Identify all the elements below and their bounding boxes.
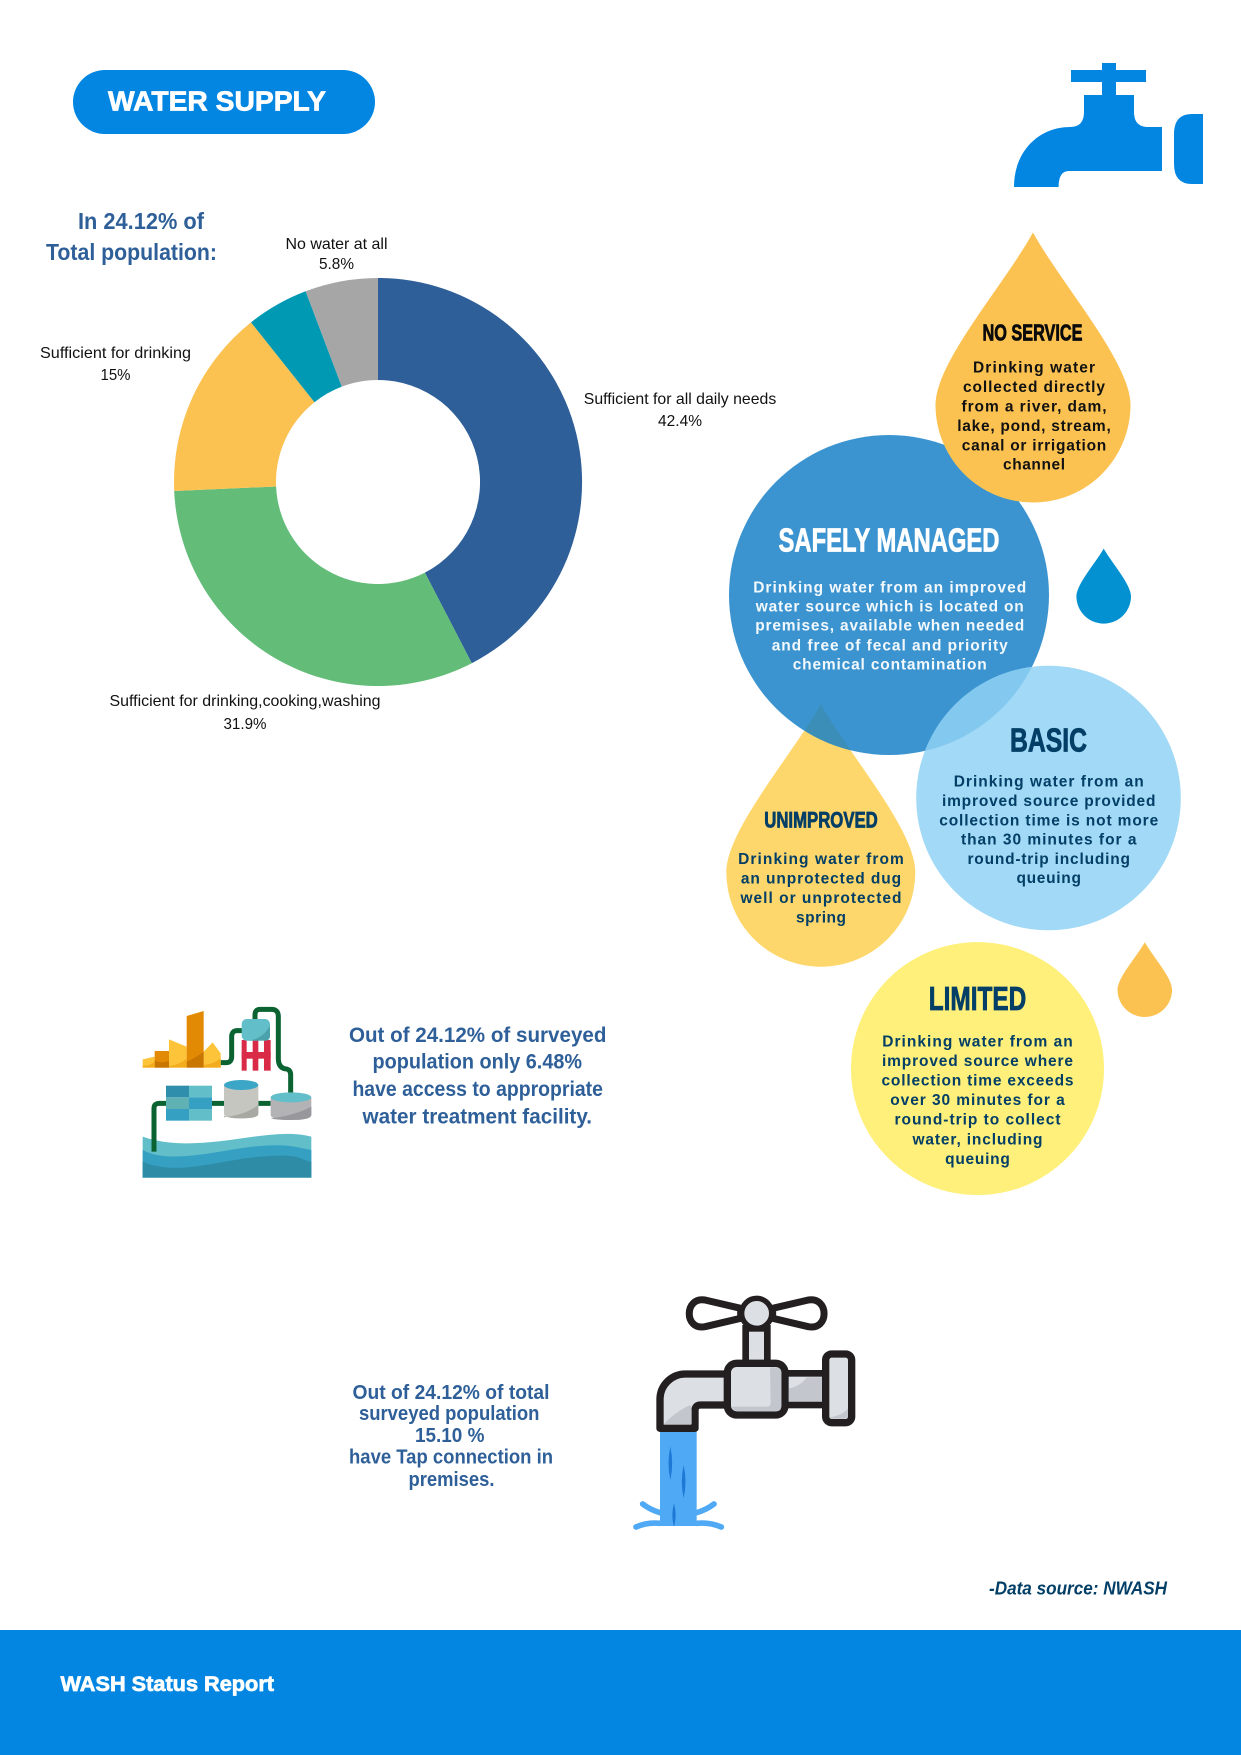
text: limited definition: collection time exceeds (882, 1072, 1074, 1090)
text: treatment facility statistic: have access to appropriate (352, 1078, 603, 1101)
text: treatment facility statistic (349, 1024, 606, 1128)
text: basic definition: collection time is not more (939, 812, 1159, 830)
text: safely managed definition: and free of fecal and priority (772, 638, 1008, 654)
text: basic definition: Drinking water from an (954, 774, 1144, 790)
panel: limited (851, 942, 1104, 1195)
chart label: sufficient for drinking (40, 345, 191, 384)
text: limited definition: water, including (912, 1132, 1042, 1148)
donut chart (174, 278, 582, 686)
heading: no service: NO SERVICE (982, 320, 1082, 346)
text: basic definition: round-trip including (967, 851, 1130, 868)
panel: basic (916, 666, 1181, 930)
text: limited definition: queuing (945, 1151, 1010, 1168)
heading: limited: LIMITED (929, 980, 1026, 1017)
footer text: WASH Status Report (60, 1673, 274, 1696)
text: safely managed definition: water source which is located on (755, 598, 1024, 616)
text: limited definition: Drinking water from an (882, 1034, 1073, 1050)
text: no service definition: from a river, dam, (962, 398, 1106, 416)
text: safely managed definition: Drinking water from an improved (753, 580, 1026, 596)
text: no service definition: Drinking water (973, 360, 1095, 376)
heading: safely managed: SAFELY MANAGED (778, 522, 1000, 558)
chart label: sufficient for drinking, cooking, washing (110, 693, 380, 733)
text: unimproved definition: well or unprotected (740, 890, 902, 907)
text: safely managed definition: premises, available when needed (755, 618, 1024, 634)
text: limited definition: over 30 minutes for a (890, 1092, 1065, 1109)
chart label: sufficient for all daily needs (584, 391, 776, 430)
text: safely managed definition: chemical contamination (793, 656, 987, 674)
chart label: sufficient for drinking: Sufficient for drinking (40, 345, 191, 362)
text: no service definition: channel (1003, 456, 1065, 474)
chart label: sufficient for all daily needs: Sufficient for all daily needs (584, 391, 776, 408)
chart heading: Total population: (46, 239, 217, 265)
text: no service definition: lake, pond, stream, (957, 418, 1111, 435)
chart label: no water at all: 5.8% (319, 256, 354, 273)
chart label: no water at all: No water at all (286, 236, 388, 253)
icon: running faucet (636, 1298, 852, 1527)
heading: basic: BASIC (1010, 722, 1087, 759)
chart heading (46, 208, 217, 265)
icon: orange water drop (1118, 942, 1172, 1017)
text: tap connection statistic: have Tap connection in (349, 1446, 553, 1468)
icon: water treatment plant (143, 1009, 311, 1178)
text: basic definition: queuing (1016, 870, 1081, 887)
chart label: no water at all (286, 236, 388, 273)
icon: blue water drop (1076, 549, 1131, 624)
text: unimproved definition: spring (796, 910, 846, 926)
text: no service definition (957, 360, 1111, 474)
text: limited definition (882, 1034, 1074, 1168)
drop shape: unimproved (726, 704, 915, 967)
text: basic definition: improved source provided (942, 793, 1155, 810)
text: no service definition: canal or irrigation (962, 438, 1106, 454)
text: safely managed definition (753, 580, 1026, 674)
chart heading: In 24.12% of (78, 208, 204, 234)
text: basic definition: than 30 minutes for a (961, 832, 1137, 848)
chart label: sufficient for all daily needs: 42.4% (658, 413, 702, 430)
chart label: sufficient for drinking: 15% (100, 367, 130, 384)
chart label: sufficient for drinking, cooking, washing: Sufficient for drinking,cooking,washing (110, 693, 380, 710)
text: tap connection statistic (349, 1382, 553, 1491)
text: treatment facility statistic: Out of 24.12% of surveyed (349, 1024, 606, 1047)
text: treatment facility statistic: population only 6.48% (373, 1050, 582, 1074)
text: tap connection statistic: premises. (408, 1469, 494, 1491)
text: basic definition (939, 774, 1159, 887)
heading: unimproved: UNIMPROVED (764, 807, 878, 832)
text: limited definition: round-trip to collect (894, 1112, 1060, 1128)
data source note: -Data source: NWASH (989, 1578, 1168, 1598)
text: unimproved definition: Drinking water from (738, 851, 904, 868)
panel: safely managed (729, 435, 1049, 755)
chart label: sufficient for drinking, cooking, washing: 31.9% (224, 716, 266, 733)
icon: blue tap (1014, 63, 1203, 187)
text: limited definition: improved source where (882, 1053, 1073, 1070)
footer band (0, 1630, 1241, 1755)
title pill: water supply: WATER SUPPLY (108, 86, 326, 116)
text: treatment facility statistic: water treatment facility. (362, 1106, 592, 1128)
panel: no service (936, 232, 1130, 502)
panel text: unimproved (738, 807, 904, 926)
title pill: water supply (73, 70, 375, 134)
text: unimproved definition (738, 851, 904, 926)
text: tap connection statistic: 15.10 % (415, 1425, 485, 1447)
text: tap connection statistic: surveyed population (359, 1403, 539, 1425)
text: no service definition: collected directly (963, 379, 1105, 396)
text: unimproved definition: an unprotected dug (741, 870, 901, 888)
text: tap connection statistic: Out of 24.12% of total (352, 1382, 550, 1404)
